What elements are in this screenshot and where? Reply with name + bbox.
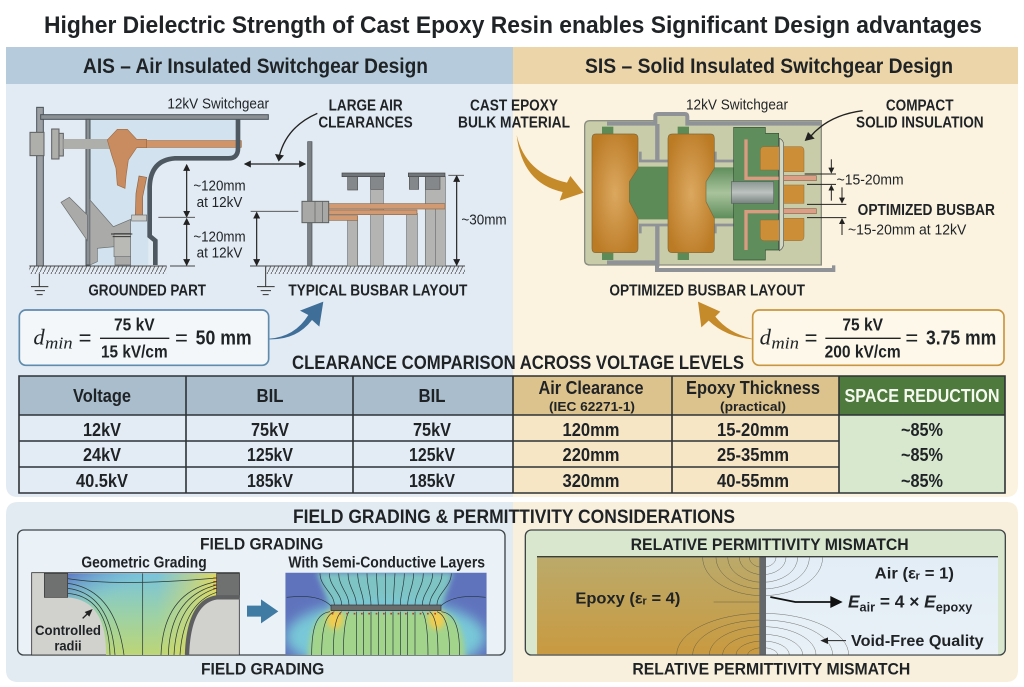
- table rows: 15-20mm: [717, 420, 789, 440]
- annotation: controlled radii: radii: [54, 638, 82, 654]
- bottom background panel: [6, 502, 1018, 682]
- label: cast epoxy bulk material: CAST EPOXY: [470, 98, 558, 115]
- center strip: [779, 138, 784, 251]
- green connectors: [602, 127, 734, 260]
- formula: E air: epoxy: [936, 601, 972, 615]
- green central core: [734, 127, 779, 260]
- formula box: SIS: 75 kV: [842, 315, 883, 335]
- table header text: BIL: [418, 386, 446, 406]
- dimension labels: ~15-20mm: [837, 173, 904, 189]
- table rows: 40-55mm: [717, 471, 789, 491]
- heading: field grading and permittivity: FIELD GRADING & PERMITTIVITY CONSIDERATIONS: [293, 507, 735, 528]
- comparison table: [19, 376, 1005, 493]
- formula box: AIS: =: [79, 325, 92, 350]
- grounded conductor pipe: [150, 119, 238, 265]
- label: optimized busbar: OPTIMIZED BUSBAR: [858, 202, 995, 219]
- table body cells: [19, 415, 1005, 493]
- table rows: 125kV: [409, 445, 455, 465]
- formula box: AIS: [19, 310, 269, 365]
- dimension labels: at 12kV: [197, 195, 243, 211]
- dimension labels: ~30mm: [461, 213, 507, 229]
- table header text: [73, 378, 1000, 414]
- formula box: SIS: min: [771, 334, 799, 353]
- panel heading: FIELD GRADING: [200, 534, 323, 553]
- callout: compact solid insulation: COMPACT: [886, 98, 954, 115]
- table rows: ~85%: [901, 445, 943, 465]
- table rows: 185kV: [409, 471, 455, 491]
- formula box: AIS: 75 kV: [114, 315, 155, 335]
- panel frame: [18, 530, 505, 655]
- epoxy region: [537, 557, 760, 654]
- table rows: 120mm: [562, 420, 620, 440]
- formula: E air: air: [860, 601, 875, 615]
- annotation: void-free quality: Void-Free Quality: [851, 633, 984, 650]
- formula box: SIS: 3.75 mm: [926, 328, 996, 350]
- label: grounded part: GROUNDED PART: [88, 283, 207, 300]
- table header text: Epoxy Thickness: [686, 378, 820, 398]
- frame posts and roof: [37, 107, 268, 266]
- arrow: orange: [698, 302, 752, 339]
- callout: compact solid insulation: [805, 98, 984, 141]
- title: Higher Dielectric Strength of Cast Epoxy Resin enables Significant Design advantages: [44, 12, 982, 39]
- formula box: SIS: [753, 310, 1004, 365]
- table rows: 24kV: [83, 445, 121, 465]
- field line arcs: [676, 558, 849, 654]
- formula: E air: = 4 ×: [875, 592, 924, 612]
- epoxy copper block 1: [592, 134, 638, 253]
- air compartment fill: [88, 119, 240, 265]
- arrow: field enhancement: [770, 596, 843, 608]
- table rows: 125kV: [247, 445, 293, 465]
- callout: large air clearances: [275, 98, 413, 162]
- dimension arrows: [187, 164, 457, 265]
- annotation: controlled radii: Controlled: [35, 622, 101, 638]
- air region: [766, 557, 998, 654]
- ground symbol left: [31, 274, 48, 295]
- table grid: [19, 376, 1005, 493]
- busbar layout: [302, 142, 445, 266]
- busbars: [746, 139, 779, 250]
- formula box: SIS: 200 kV/cm: [825, 341, 901, 361]
- annotation: controlled radii: [35, 609, 101, 654]
- bushing and shaft: [30, 129, 110, 159]
- formula box: AIS: min: [45, 334, 73, 353]
- plot: semi-conductive layers: [285, 572, 487, 655]
- ground symbol right: [257, 267, 275, 295]
- table header text: SPACE REDUCTION: [844, 386, 1000, 406]
- panel: field grading: [18, 530, 505, 679]
- table rows: 185kV: [247, 471, 293, 491]
- copper contacts: [760, 147, 804, 241]
- label: air: Air (εᵣ = 1): [875, 566, 954, 583]
- label: cast epoxy bulk material: [458, 98, 570, 132]
- table header text: BIL: [256, 386, 284, 406]
- insulating barrier: [759, 557, 766, 655]
- panel heading: RELATIVE PERMITTIVITY MISMATCH: [631, 535, 909, 554]
- header band: AIS: [6, 47, 513, 84]
- panel: relative permittivity mismatch: [524, 529, 1006, 674]
- table header cells: [19, 376, 1005, 415]
- formula box: AIS: d: [33, 325, 45, 350]
- dimension labels: ~120mm: [193, 229, 246, 245]
- table rows: ~85%: [901, 471, 943, 491]
- plot: geometric grading: [32, 573, 239, 655]
- dimension labels: [837, 173, 967, 238]
- label: geometric grading: Geometric Grading: [81, 554, 207, 571]
- label: 12kV Switchgear: 12kV Switchgear: [167, 97, 269, 113]
- label: with semi-conductive layers: With Semi-Conductive Layers: [288, 554, 485, 571]
- formula box: SIS: d: [760, 325, 772, 350]
- ground line and hatching: [29, 266, 465, 274]
- table header text: Air Clearance: [538, 378, 644, 398]
- header band: SIS: SIS – Solid Insulated Switchgear Design: [585, 55, 953, 78]
- copper contact: [107, 129, 241, 188]
- table rows: 12kV: [83, 420, 121, 440]
- table header text: Voltage: [73, 386, 131, 406]
- dimension labels: [193, 179, 507, 261]
- caption: RELATIVE PERMITTIVITY MISMATCH: [632, 660, 910, 679]
- dimension labels: ~120mm: [193, 179, 246, 195]
- label: epoxy: Epoxy (εᵣ = 4): [575, 590, 680, 607]
- callout: compact solid insulation: SOLID INSULATION: [856, 115, 984, 132]
- formula: E air: E: [924, 592, 936, 612]
- table rows: 40.5kV: [76, 471, 128, 491]
- table rows: ~85%: [901, 420, 943, 440]
- SIS cast epoxy diagram: [458, 97, 1004, 365]
- header band: AIS: AIS – Air Insulated Switchgear Design: [83, 55, 428, 78]
- dimension lines: [805, 159, 846, 235]
- table rows: 75kV: [251, 420, 289, 440]
- dimension ticks: [158, 175, 464, 217]
- central cylinder: [731, 182, 774, 203]
- caption: FIELD GRADING: [201, 660, 324, 679]
- dimension labels: at 12kV: [197, 245, 243, 261]
- AIS switchgear diagram: [19, 97, 507, 365]
- housing: [585, 114, 835, 272]
- formula box: SIS: =: [905, 325, 918, 350]
- table rows: 75kV: [413, 420, 451, 440]
- formula box: SIS: =: [805, 325, 818, 350]
- callout: large air clearances: CLEARANCES: [318, 115, 413, 132]
- label: 12kV Switchgear: 12kV Switchgear: [686, 97, 788, 113]
- table rows: 220mm: [562, 445, 620, 465]
- label: typical busbar layout: TYPICAL BUSBAR LAYOUT: [288, 283, 468, 300]
- heading: clearance comparison: CLEARANCE COMPARISON ACROSS VOLTAGE LEVELS: [292, 353, 744, 374]
- breaker body: [61, 197, 147, 265]
- copper arm: [135, 176, 147, 215]
- arrow: cast epoxy to housing: [517, 135, 584, 201]
- background panel: AIS side: [6, 83, 513, 497]
- top divider: [537, 555, 998, 559]
- formula box: AIS: 15 kV/cm: [101, 341, 168, 361]
- formula box: AIS: =: [175, 325, 188, 350]
- table rows: 25-35mm: [717, 445, 789, 465]
- panel frame: [525, 530, 1005, 655]
- formula: E air: E: [848, 592, 860, 612]
- epoxy copper block 2: [668, 134, 714, 253]
- callout: large air clearances: LARGE AIR: [329, 98, 403, 115]
- table rows: [76, 420, 943, 491]
- formula box: AIS: 50 mm: [196, 328, 252, 350]
- label: cast epoxy bulk material: BULK MATERIAL: [458, 115, 570, 132]
- label: optimized busbar layout: OPTIMIZED BUSBAR LAYOUT: [609, 283, 806, 300]
- table header text: (IEC 62271-1): [549, 399, 635, 414]
- header band: SIS: [513, 47, 1018, 84]
- table rows: 320mm: [562, 471, 620, 491]
- arrow: geometric to semi-conductive: [247, 599, 278, 623]
- table header text: (practical): [720, 399, 786, 414]
- arrow: blue: [269, 302, 323, 339]
- dimension labels: ~15-20mm at 12kV: [848, 222, 967, 238]
- background panel: SIS side: [513, 83, 1018, 497]
